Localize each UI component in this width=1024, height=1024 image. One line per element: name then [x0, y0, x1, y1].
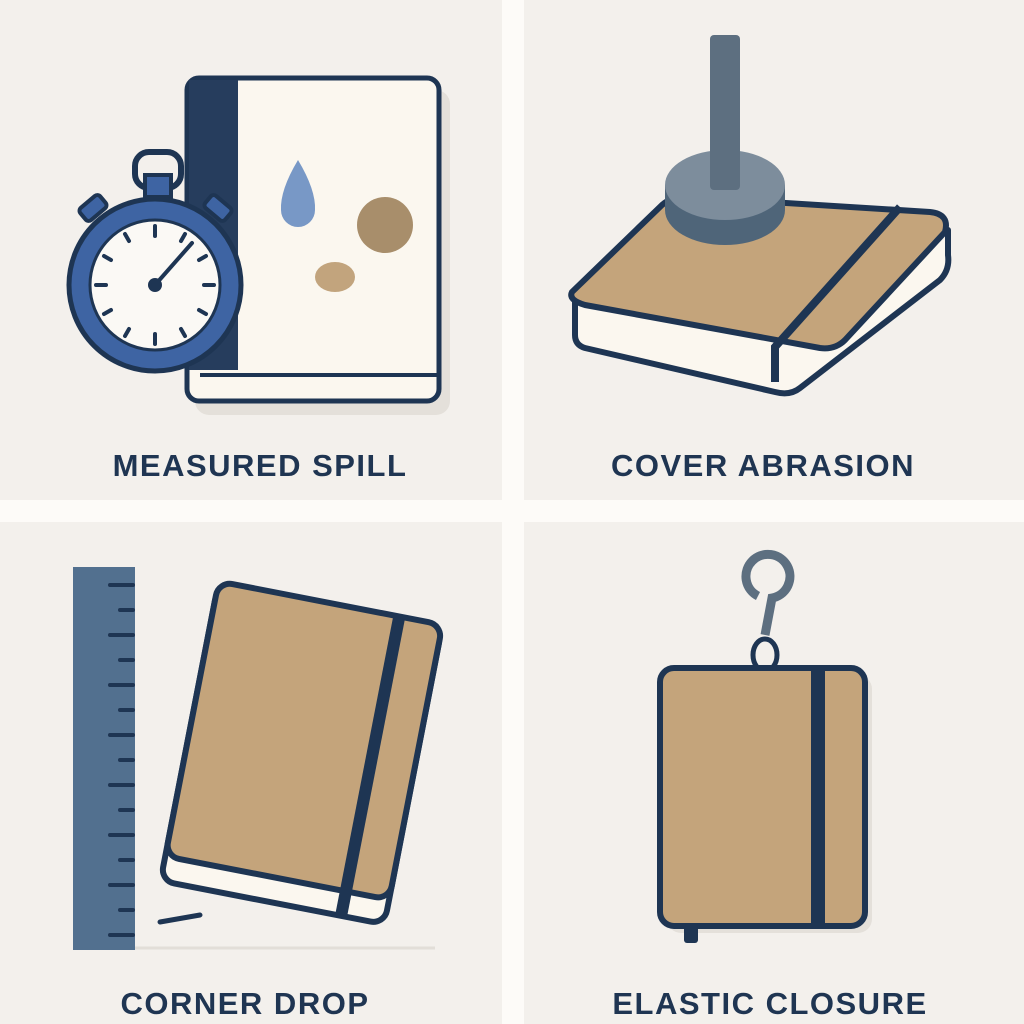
panel: elastic closure [524, 522, 1024, 1024]
label: COVER ABRASION [611, 448, 915, 483]
icon: notebook flat [571, 197, 948, 393]
icon: notebook with stains [187, 78, 450, 415]
icon: abrasion weight [665, 35, 785, 245]
icon: stopwatch [69, 152, 241, 371]
icon: hook [746, 554, 790, 671]
label: ELASTIC CLOSURE [612, 986, 928, 1021]
panel: cover abrasion [524, 0, 1024, 500]
label: MEASURED SPILL [113, 448, 407, 483]
label: CORNER DROP [120, 986, 370, 1021]
icon: falling notebook [160, 581, 442, 924]
panel: measured spill [0, 0, 502, 500]
panel: corner drop [0, 522, 502, 1024]
icon: hanging notebook [660, 668, 872, 943]
icon: ruler [73, 567, 435, 950]
